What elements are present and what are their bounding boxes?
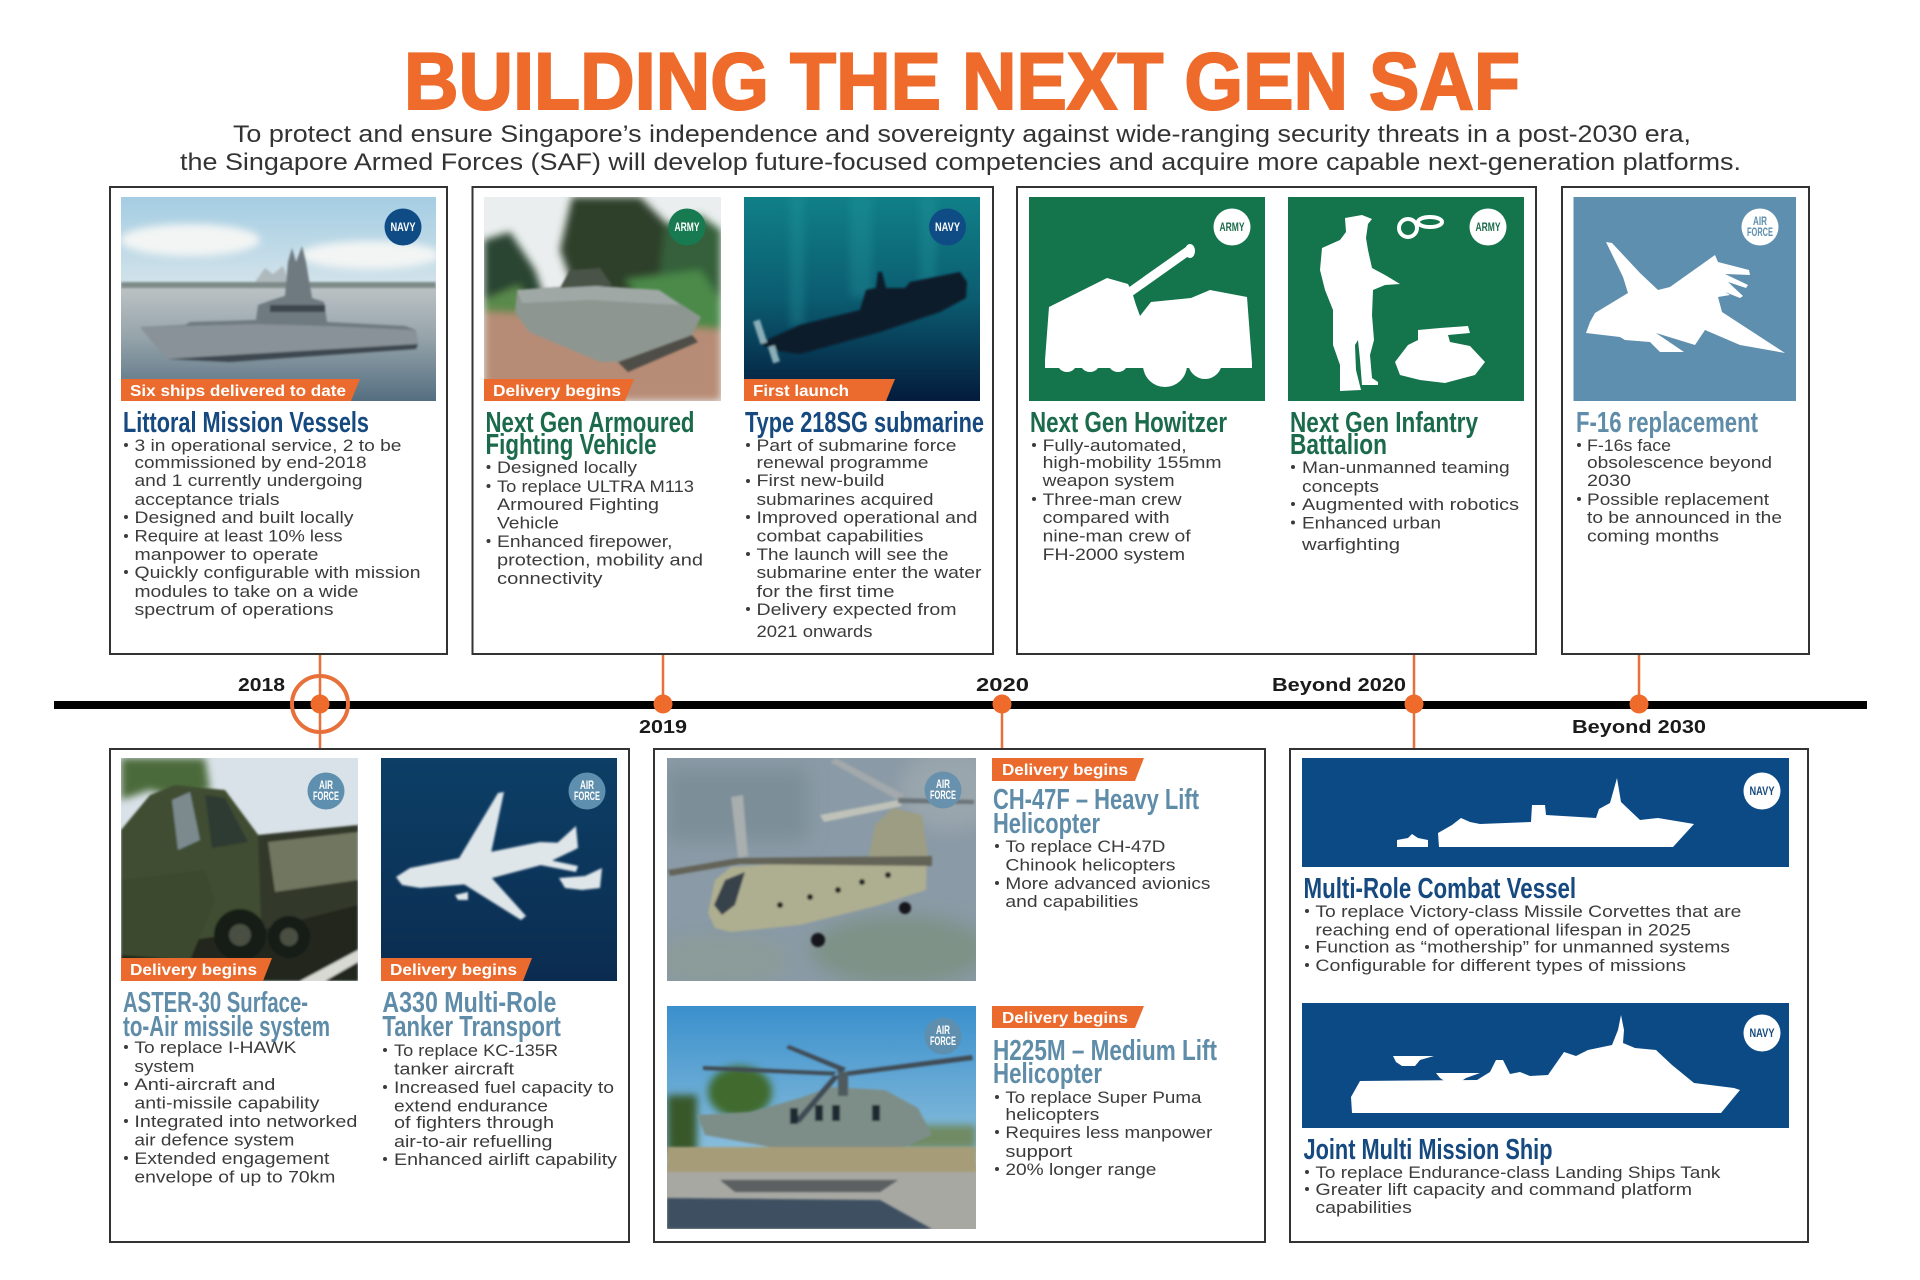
text: submarine bullets: Part of submarine force xyxy=(756,437,956,455)
text: h225m bullets: To replace Super Puma xyxy=(1005,1089,1202,1107)
badge: navy: NAVY xyxy=(1750,1028,1775,1040)
heading: multi-role combat vessel: Multi-Role Combat Vessel xyxy=(1304,873,1576,905)
text: littoral bullets: modules to take on a wide xyxy=(134,583,358,601)
graphic: joint multi mission ship silhouette xyxy=(1302,1003,1789,1128)
panel: beyond 2030 f-16 replacement xyxy=(1562,187,1809,654)
text: afv bullets: Enhanced firepower, xyxy=(497,533,672,551)
timeline: 2019 xyxy=(639,717,687,737)
text: aster-30 bullets: system xyxy=(134,1058,194,1076)
text: littoral bullets: Quickly configurable with mission xyxy=(134,564,420,582)
text: mrcv bullets: Configurable for different types of missions xyxy=(1315,957,1686,975)
text: h225m bullets: support xyxy=(1005,1143,1073,1161)
heading: ch-47f: Helicopter xyxy=(993,808,1100,840)
text: howitzer bullets: FH-2000 system xyxy=(1043,546,1185,564)
panel: beyond 2020 navy ships xyxy=(1290,749,1808,1242)
text: afv bullets xyxy=(486,459,703,588)
tag: delivery begins h225m xyxy=(992,1006,1144,1028)
text: littoral bullets: commissioned by end-2018 xyxy=(134,454,366,472)
text: littoral bullets: Designed and built locally xyxy=(134,509,354,527)
badge: army: ARMY xyxy=(1220,222,1245,234)
text: aster-30 bullets: To replace I-HAWK xyxy=(134,1039,296,1057)
graphic: f-16 silhouette xyxy=(1574,197,1796,401)
panel: 2020 helicopters xyxy=(650,749,1265,1242)
text: mrcv bullets: Function as “mothership” for unmanned systems xyxy=(1315,938,1730,956)
badge: navy: NAVY xyxy=(1750,786,1775,798)
text: ch-47f bullets xyxy=(995,838,1210,911)
badge: air force: AIR xyxy=(936,779,950,791)
text: littoral bullets: and 1 currently undergoing xyxy=(134,472,362,490)
text: littoral bullets: manpower to operate xyxy=(134,546,318,564)
text: infantry bullets: warfighting xyxy=(1301,536,1400,554)
heading: h225m: Helicopter xyxy=(993,1058,1102,1090)
tag: delivery begins: Delivery begins xyxy=(493,383,621,400)
tag: delivery begins xyxy=(484,379,634,401)
heading: next gen armoured fighting vehicle xyxy=(486,407,694,461)
text: jmms bullets xyxy=(1305,1164,1721,1217)
badge: navy xyxy=(1744,772,1780,810)
photo: ch-47f helicopter xyxy=(667,758,976,981)
tag: delivery begins ch-47f xyxy=(992,758,1144,781)
subtitle xyxy=(180,121,1741,176)
text: aster-30 bullets xyxy=(124,1039,357,1186)
text: ch-47f bullets: More advanced avionics xyxy=(1005,875,1210,893)
timeline: 2018 xyxy=(238,675,285,695)
text: aster-30 bullets: Integrated into networked xyxy=(134,1113,357,1131)
badge: navy xyxy=(384,208,422,246)
heading: next gen infantry battalion: Battalion xyxy=(1290,429,1387,461)
text: infantry bullets: Enhanced urban xyxy=(1302,514,1441,532)
text: mrcv bullets: To replace Victory-class Missile Corvettes that are xyxy=(1315,903,1741,921)
text: a330 bullets xyxy=(383,1042,618,1169)
graphic: infantry, robot and drone silhouettes xyxy=(1288,197,1524,401)
text: a330 bullets: air-to-air refuelling xyxy=(394,1133,552,1151)
badge: air force: AIR xyxy=(580,780,594,792)
timeline: Beyond 2020 xyxy=(1272,675,1406,695)
text: howitzer bullets: high-mobility 155mm xyxy=(1043,454,1222,472)
heading: ch-47f: CH-47F – Heavy Lift xyxy=(993,784,1199,816)
tag: first launch: First launch xyxy=(753,383,849,400)
text: submarine bullets: Improved operational and xyxy=(756,509,978,527)
heading: next gen armoured fighting vehicle: Fighting Vehicle xyxy=(486,429,656,461)
text: mrcv bullets: reaching end of operational lifespan in 2025 xyxy=(1315,922,1691,940)
text: mrcv bullets xyxy=(1305,903,1741,975)
text: a330 bullets: Increased fuel capacity to xyxy=(394,1079,614,1097)
text: howitzer bullets: compared with xyxy=(1043,509,1170,527)
heading: h225m xyxy=(993,1035,1217,1090)
text: afv bullets: To replace ULTRA M113 xyxy=(497,478,694,496)
badge: air force xyxy=(1742,208,1778,246)
badge: air force xyxy=(568,772,606,810)
text: submarine bullets: for the first time xyxy=(756,583,894,601)
text: howitzer bullets: Three-man crew xyxy=(1043,491,1182,509)
badge: navy: NAVY xyxy=(390,222,416,234)
heading: ch-47f xyxy=(993,784,1199,840)
heading: next gen howitzer: Next Gen Howitzer xyxy=(1030,407,1227,439)
text: a330 bullets: To replace KC-135R xyxy=(394,1042,558,1060)
text: a330 bullets: extend endurance xyxy=(394,1098,548,1116)
badge: air force: AIR xyxy=(319,780,333,792)
subtitle: To protect and ensure Singapore’s independence and sovereignty against wide-ranging security threats in a post-2030 era, xyxy=(233,121,1691,148)
badge: air force xyxy=(308,772,344,810)
text: aster-30 bullets: envelope of up to 70km xyxy=(134,1168,335,1186)
heading: aster-30 xyxy=(123,987,330,1043)
text: submarine bullets: combat capabilities xyxy=(756,528,924,546)
text: h225m bullets: Requires less manpower xyxy=(1005,1124,1213,1142)
text: infantry bullets: Augmented with robotics xyxy=(1302,496,1519,514)
badge: army xyxy=(668,208,706,246)
text: aster-30 bullets: Extended engagement xyxy=(134,1150,330,1168)
tag: delivery begins xyxy=(121,958,272,981)
panel: 2018 aster-30 and a330 xyxy=(110,749,629,1242)
heading: littoral mission vessels: Littoral Mission Vessels xyxy=(123,407,369,439)
badge: air force: FORCE xyxy=(574,791,600,803)
badge: air force: FORCE xyxy=(930,790,956,802)
text: submarine bullets: 2021 onwards xyxy=(756,623,872,641)
text: howitzer bullets: nine-man crew of xyxy=(1043,528,1191,546)
heading: h225m: H225M – Medium Lift xyxy=(993,1035,1217,1067)
text: f-16 bullets xyxy=(1577,437,1782,546)
badge: army xyxy=(1470,208,1506,246)
text: a330 bullets: Enhanced airlift capability xyxy=(394,1151,618,1169)
badge: navy xyxy=(1744,1014,1780,1052)
text: aster-30 bullets: anti-missile capability xyxy=(134,1094,320,1112)
heading: f-16 replacement: F-16 replacement xyxy=(1576,407,1758,439)
graphic: howitzer silhouette xyxy=(1029,197,1265,401)
text: submarine bullets: renewal programme xyxy=(756,454,928,472)
photo: armoured fighting vehicle xyxy=(484,197,721,401)
heading: type 218sg submarine: Type 218SG submarine xyxy=(745,407,984,439)
badge: air force: AIR xyxy=(1753,216,1767,228)
text: littoral bullets: 3 in operational service, 2 to be xyxy=(134,437,402,455)
text: howitzer bullets xyxy=(1032,437,1222,564)
text: a330 bullets: tanker aircraft xyxy=(394,1060,514,1078)
heading: a330 xyxy=(382,987,561,1043)
text: jmms bullets: capabilities xyxy=(1315,1199,1412,1217)
text: aster-30 bullets: Anti-aircraft and xyxy=(134,1076,275,1094)
timeline: 2020 xyxy=(976,675,1029,695)
text: afv bullets: protection, mobility and xyxy=(497,552,703,570)
text: f-16 bullets: Possible replacement xyxy=(1587,491,1769,509)
badge: navy: NAVY xyxy=(935,222,960,234)
text: submarine bullets: Delivery expected from xyxy=(756,601,956,619)
tag: delivery begins: Delivery begins xyxy=(130,962,257,979)
photo: type 218sg submarine xyxy=(744,197,980,401)
text: jmms bullets: To replace Endurance-class Landing Ships Tank xyxy=(1315,1164,1721,1182)
tag: delivery begins xyxy=(381,958,532,981)
badge: army: ARMY xyxy=(1476,222,1501,234)
tag: six ships delivered to date xyxy=(121,379,360,401)
text: howitzer bullets: weapon system xyxy=(1041,472,1175,490)
text: a330 bullets: of fighters through xyxy=(394,1114,554,1132)
text: ch-47f bullets: and capabilities xyxy=(1005,893,1138,911)
tag: delivery begins ch-47f: Delivery begins xyxy=(1002,762,1128,779)
tag: six ships delivered to date: Six ships delivered to date xyxy=(130,383,346,400)
text: afv bullets: Armoured Fighting xyxy=(497,496,659,514)
photo: a330 tanker xyxy=(381,758,617,981)
text: h225m bullets xyxy=(995,1089,1213,1179)
text: afv bullets: connectivity xyxy=(497,570,603,588)
text: littoral bullets xyxy=(124,437,420,619)
heading: joint multi mission ship: Joint Multi Mission Ship xyxy=(1304,1134,1552,1166)
heading: aster-30: to-Air missile system xyxy=(123,1011,330,1043)
text: h225m bullets: helicopters xyxy=(1005,1106,1099,1124)
heading: a330: Tanker Transport xyxy=(382,1011,561,1043)
badge: navy xyxy=(929,208,966,246)
text: ch-47f bullets: To replace CH-47D xyxy=(1005,838,1165,856)
text: f-16 bullets: F-16s face xyxy=(1587,437,1671,455)
heading: aster-30: ASTER-30 Surface- xyxy=(123,987,308,1019)
text: afv bullets: Vehicle xyxy=(497,514,559,532)
text: infantry bullets: Man-unmanned teaming xyxy=(1302,459,1510,477)
text: submarine bullets: submarine enter the water xyxy=(756,564,982,582)
badge: air force: FORCE xyxy=(1747,227,1773,239)
badge: army: ARMY xyxy=(674,222,700,234)
text: littoral bullets: spectrum of operations xyxy=(134,601,334,619)
badge: army xyxy=(1214,208,1250,246)
title: BUILDING THE NEXT GEN SAF xyxy=(404,37,1520,127)
text: f-16 bullets: to be announced in the xyxy=(1587,509,1782,527)
text: aster-30 bullets: air defence system xyxy=(134,1132,294,1150)
text: f-16 bullets: coming months xyxy=(1587,528,1719,546)
heading: next gen armoured fighting vehicle: Next Gen Armoured xyxy=(486,407,694,439)
text: littoral bullets: Require at least 10% less xyxy=(134,528,342,546)
text: h225m bullets: 20% longer range xyxy=(1005,1161,1156,1179)
text: submarine bullets: The launch will see the xyxy=(756,546,948,564)
heading: next gen infantry battalion xyxy=(1290,407,1478,461)
text: jmms bullets: Greater lift capacity and command platform xyxy=(1315,1181,1692,1199)
timeline xyxy=(54,654,1867,749)
panel: 2019 armoured fighting vehicle and submarine xyxy=(472,187,993,654)
text: submarine bullets: submarines acquired xyxy=(756,491,934,509)
text: afv bullets: Designed locally xyxy=(497,459,638,477)
heading: a330: A330 Multi-Role xyxy=(382,987,556,1019)
text: submarine bullets: First new-build xyxy=(756,472,884,490)
badge: air force xyxy=(924,772,962,808)
text: infantry bullets xyxy=(1291,459,1519,554)
photo: aster-30 truck xyxy=(121,758,358,981)
heading: next gen infantry battalion: Next Gen Infantry xyxy=(1290,407,1478,439)
text: f-16 bullets: obsolescence beyond xyxy=(1587,454,1772,472)
subtitle: the Singapore Armed Forces (SAF) will develop future-focused competencies and acquire more capable next-generation platforms. xyxy=(180,149,1741,176)
badge: air force: FORCE xyxy=(313,791,339,803)
text: howitzer bullets: Fully-automated, xyxy=(1043,437,1187,455)
panel: 2020 howitzer and infantry battalion xyxy=(1017,187,1536,654)
text: ch-47f bullets: Chinook helicopters xyxy=(1005,856,1175,874)
tag: delivery begins h225m: Delivery begins xyxy=(1002,1010,1128,1027)
badge: air force xyxy=(924,1018,962,1054)
photo: h225m helicopter xyxy=(667,1006,976,1229)
text: infantry bullets: concepts xyxy=(1302,478,1379,496)
graphic: multi-role combat vessel silhouette xyxy=(1302,758,1789,867)
photo: littoral mission vessel xyxy=(120,197,440,401)
panel: 2018 navy littoral mission vessels xyxy=(110,187,447,654)
badge: air force: AIR xyxy=(936,1025,950,1037)
badge: air force: FORCE xyxy=(930,1036,956,1048)
text: submarine bullets xyxy=(746,437,982,641)
timeline: Beyond 2030 xyxy=(1572,717,1706,737)
text: littoral bullets: acceptance trials xyxy=(134,491,280,509)
tag: first launch xyxy=(744,379,895,401)
text: f-16 bullets: 2030 xyxy=(1587,472,1631,490)
tag: delivery begins: Delivery begins xyxy=(390,962,517,979)
